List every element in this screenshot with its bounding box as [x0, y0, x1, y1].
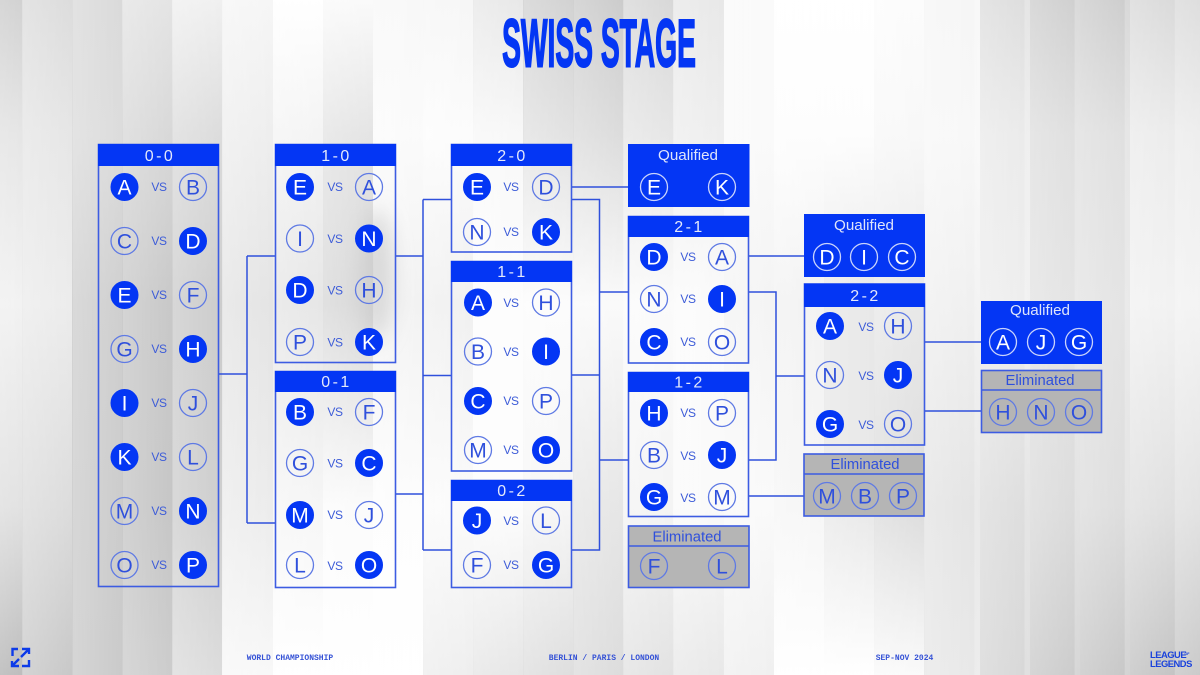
- panel: 1-1 round: I: [543, 341, 549, 364]
- panel: 0-1 round: VS: [327, 559, 343, 573]
- panel: 1-1 round: [451, 261, 572, 471]
- panel: eliminated M B P: Eliminated: [830, 457, 900, 473]
- panel: 0-0 round: C: [117, 230, 132, 254]
- panel: 2-1 round: D: [646, 246, 662, 270]
- panel: 2-0 round: E: [470, 176, 484, 200]
- panel: 0-0 round: G: [116, 338, 133, 362]
- panel: 2-1 round: VS: [680, 292, 696, 306]
- logo: League of Legends: LEAGUE: [1150, 649, 1186, 660]
- panel: 0-1 round: C: [361, 452, 377, 476]
- panel: 0-0 round: H: [185, 338, 201, 362]
- panel: 0-0 round: VS: [151, 504, 167, 518]
- panel: 2-2 round: N: [822, 364, 838, 388]
- footer: event name: WORLD CHAMPIONSHIP: [247, 654, 333, 663]
- panel: 1-0 round: E: [293, 176, 307, 200]
- panel: 1-2 round: VS: [680, 449, 696, 463]
- panel: eliminated M B P: M: [818, 486, 836, 508]
- panel: 1-1 round: H: [538, 292, 554, 315]
- panel: 2-1 round: VS: [680, 335, 696, 349]
- panel: qualified E K: E: [647, 176, 661, 200]
- panel: 0-1 round: VS: [327, 405, 343, 419]
- panel: 1-2 round: VS: [680, 406, 696, 420]
- panel: 0-2 round: J: [472, 510, 482, 533]
- logo: League of Legends: LEGENDS: [1150, 658, 1192, 669]
- panel: 1-1 round: M: [469, 440, 487, 462]
- panel: 0-2 round: G: [538, 554, 554, 578]
- panel: 0-0 round: P: [186, 554, 200, 578]
- panel: qualified E K: K: [715, 176, 729, 200]
- panel: 0-0 round: A: [117, 176, 132, 200]
- panel: 0-1 round: VS: [327, 456, 343, 470]
- panel: 0-0 round: O: [116, 554, 133, 578]
- panel: 1-0 round: VS: [327, 336, 343, 350]
- panel: 0-1 round: VS: [327, 508, 343, 522]
- panel: 0-0 round: 0-0: [145, 148, 175, 165]
- footer: dates: SEP-NOV 2024: [876, 654, 934, 663]
- panel: 1-0 round: D: [292, 280, 308, 302]
- panel: 2-1 round: VS: [680, 250, 696, 264]
- panel: 0-1 round: O: [361, 554, 377, 578]
- panel: 0-1 round: [275, 371, 396, 588]
- panel: 0-2 round: 0-2: [497, 483, 528, 500]
- panel: 1-2 round: [628, 372, 749, 516]
- panel: 0-2 round: F: [471, 554, 483, 578]
- panel: 1-0 round: 1-0: [321, 148, 352, 165]
- panel: eliminated F L: [628, 526, 749, 588]
- panel: 2-1 round: N: [646, 288, 662, 312]
- footer: cities: BERLIN / PARIS / LONDON: [549, 654, 659, 663]
- panel: eliminated F L: L: [716, 556, 728, 578]
- panel: qualified A J G: [981, 301, 1102, 364]
- panel: 0-0 round: J: [188, 392, 198, 416]
- panel: 0-0 round: B: [186, 176, 200, 200]
- panel: 0-1 round: F: [363, 402, 375, 424]
- panel: 0-1 round: J: [364, 504, 374, 528]
- panel: eliminated H N O: N: [1033, 402, 1049, 424]
- panel: 1-1 round: VS: [503, 394, 519, 408]
- panel: 0-0 round: N: [185, 500, 201, 524]
- panel: 2-0 round: 2-0: [497, 148, 528, 165]
- panel: qualified A J G: A: [996, 332, 1010, 354]
- panel: 1-0 round: H: [361, 280, 377, 302]
- panel: 2-1 round: 2-1: [674, 219, 705, 236]
- panel: 0-0 round: I: [122, 392, 127, 416]
- panel: 2-0 round: D: [538, 176, 554, 200]
- panel: 0-0 round: M: [116, 500, 133, 524]
- panel: 2-2 round: VS: [858, 418, 874, 432]
- panel: 1-1 round: B: [471, 341, 485, 364]
- panel: 0-0 round: VS: [151, 342, 167, 356]
- icon: expand arrows logo: [12, 649, 29, 666]
- panel: 1-0 round: P: [293, 332, 307, 354]
- panel: eliminated M B P: [804, 454, 924, 516]
- panel: 1-1 round: A: [471, 292, 485, 315]
- panel: 0-0 round: [98, 144, 219, 586]
- panel: 1-1 round: VS: [503, 296, 519, 310]
- panel: 0-1 round: B: [293, 402, 307, 424]
- panel: 2-2 round: [804, 284, 925, 445]
- panel: eliminated H N O: [982, 370, 1102, 432]
- panel: 1-2 round: G: [646, 486, 662, 510]
- panel: 2-1 round: [628, 216, 749, 363]
- panel: 1-1 round: P: [539, 390, 553, 414]
- panel: 2-1 round: A: [715, 246, 729, 270]
- panel: qualified D I C: C: [894, 246, 910, 270]
- panel: eliminated M B P: B: [858, 486, 872, 508]
- panel: 2-0 round: VS: [503, 180, 519, 194]
- panel: 0-0 round: F: [187, 284, 199, 308]
- panel: 0-0 round: VS: [151, 450, 167, 464]
- panel: 1-1 round: O: [538, 440, 554, 462]
- panel: eliminated F L: F: [648, 556, 660, 578]
- panel: eliminated H N O: H: [995, 402, 1011, 424]
- panel: 1-0 round: VS: [327, 284, 343, 298]
- panel: qualified A J G: Qualified: [1010, 302, 1070, 319]
- panel: qualified E K: [628, 144, 750, 207]
- panel: 1-1 round: C: [470, 390, 486, 414]
- panel: eliminated M B P: P: [896, 486, 910, 508]
- panel: 1-1 round: VS: [503, 443, 519, 457]
- panel: qualified A J G: J: [1036, 332, 1046, 354]
- panel: 2-1 round: I: [719, 288, 725, 312]
- panel: 0-0 round: L: [187, 446, 199, 470]
- panel: 0-1 round: G: [292, 452, 308, 476]
- panel: 1-0 round: [275, 144, 396, 362]
- panel: 2-2 round: VS: [858, 320, 874, 334]
- panel: qualified D I C: I: [861, 246, 867, 270]
- panel: 0-1 round: L: [294, 554, 306, 578]
- panel: 0-1 round: 0-1: [321, 374, 352, 391]
- panel: 2-2 round: O: [890, 414, 906, 436]
- panel: 1-0 round: VS: [327, 232, 343, 246]
- panel: 1-0 round: I: [297, 228, 303, 251]
- panel: 1-2 round: B: [647, 444, 661, 468]
- panel: 0-0 round: K: [117, 446, 132, 470]
- panel: 0-0 round: VS: [151, 396, 167, 410]
- panel: 0-0 round: VS: [151, 558, 167, 572]
- panel: 2-0 round: VS: [503, 225, 519, 239]
- panel: 2-2 round: VS: [858, 369, 874, 383]
- panel: 0-1 round: M: [291, 504, 309, 528]
- panel: 0-2 round: L: [540, 510, 552, 533]
- panel: 2-0 round: [451, 144, 572, 252]
- panel: 2-0 round: K: [539, 222, 553, 244]
- panel: 2-2 round: 2-2: [850, 288, 881, 305]
- panel: qualified E K: Qualified: [658, 147, 718, 164]
- panel: 1-2 round: M: [713, 486, 731, 510]
- panel: 2-2 round: J: [893, 364, 903, 388]
- panel: qualified D I C: D: [819, 246, 835, 270]
- panel: 1-0 round: VS: [327, 180, 343, 194]
- panel: 1-1 round: 1-1: [497, 264, 528, 281]
- panel: 1-2 round: P: [715, 402, 729, 426]
- panel: 0-2 round: VS: [503, 514, 519, 528]
- panel: 1-2 round: 1-2: [674, 374, 705, 392]
- logo: League of Legends: OF: [1184, 652, 1190, 656]
- panel: 0-0 round: VS: [151, 180, 167, 194]
- panel: 0-2 round: [451, 480, 572, 588]
- panel: 0-2 round: VS: [503, 558, 519, 572]
- panel: eliminated H N O: Eliminated: [1005, 373, 1075, 389]
- bracket connectors: [219, 187, 981, 550]
- panel: 1-2 round: H: [646, 402, 662, 426]
- panel: qualified D I C: [804, 214, 925, 277]
- panel: qualified D I C: Qualified: [834, 217, 894, 234]
- panel: eliminated H N O: O: [1071, 402, 1087, 424]
- logo: League of Legends: [1150, 649, 1192, 669]
- panel: 0-0 round: VS: [151, 234, 167, 248]
- panel: eliminated F L: Eliminated: [652, 530, 722, 546]
- panel: 2-1 round: O: [714, 332, 730, 354]
- panel: 0-0 round: E: [117, 284, 132, 308]
- panel: 2-2 round: H: [890, 316, 906, 338]
- panel: 1-2 round: VS: [680, 491, 696, 505]
- panel: 2-2 round: G: [822, 414, 838, 436]
- panel: 0-0 round: VS: [151, 288, 167, 302]
- panel: 0-0 round: D: [185, 230, 201, 254]
- panel: 1-0 round: K: [362, 332, 376, 354]
- panel: 2-0 round: N: [469, 222, 485, 244]
- panel: 1-2 round: J: [717, 444, 727, 468]
- panel: 1-1 round: VS: [503, 345, 519, 359]
- panel: 2-1 round: C: [646, 332, 662, 354]
- panel: 1-0 round: A: [362, 176, 376, 200]
- panel: 1-0 round: N: [361, 228, 377, 251]
- title: SWISS STAGE: [502, 6, 696, 82]
- panel: 2-2 round: A: [823, 316, 837, 338]
- panel: qualified A J G: G: [1071, 332, 1087, 354]
